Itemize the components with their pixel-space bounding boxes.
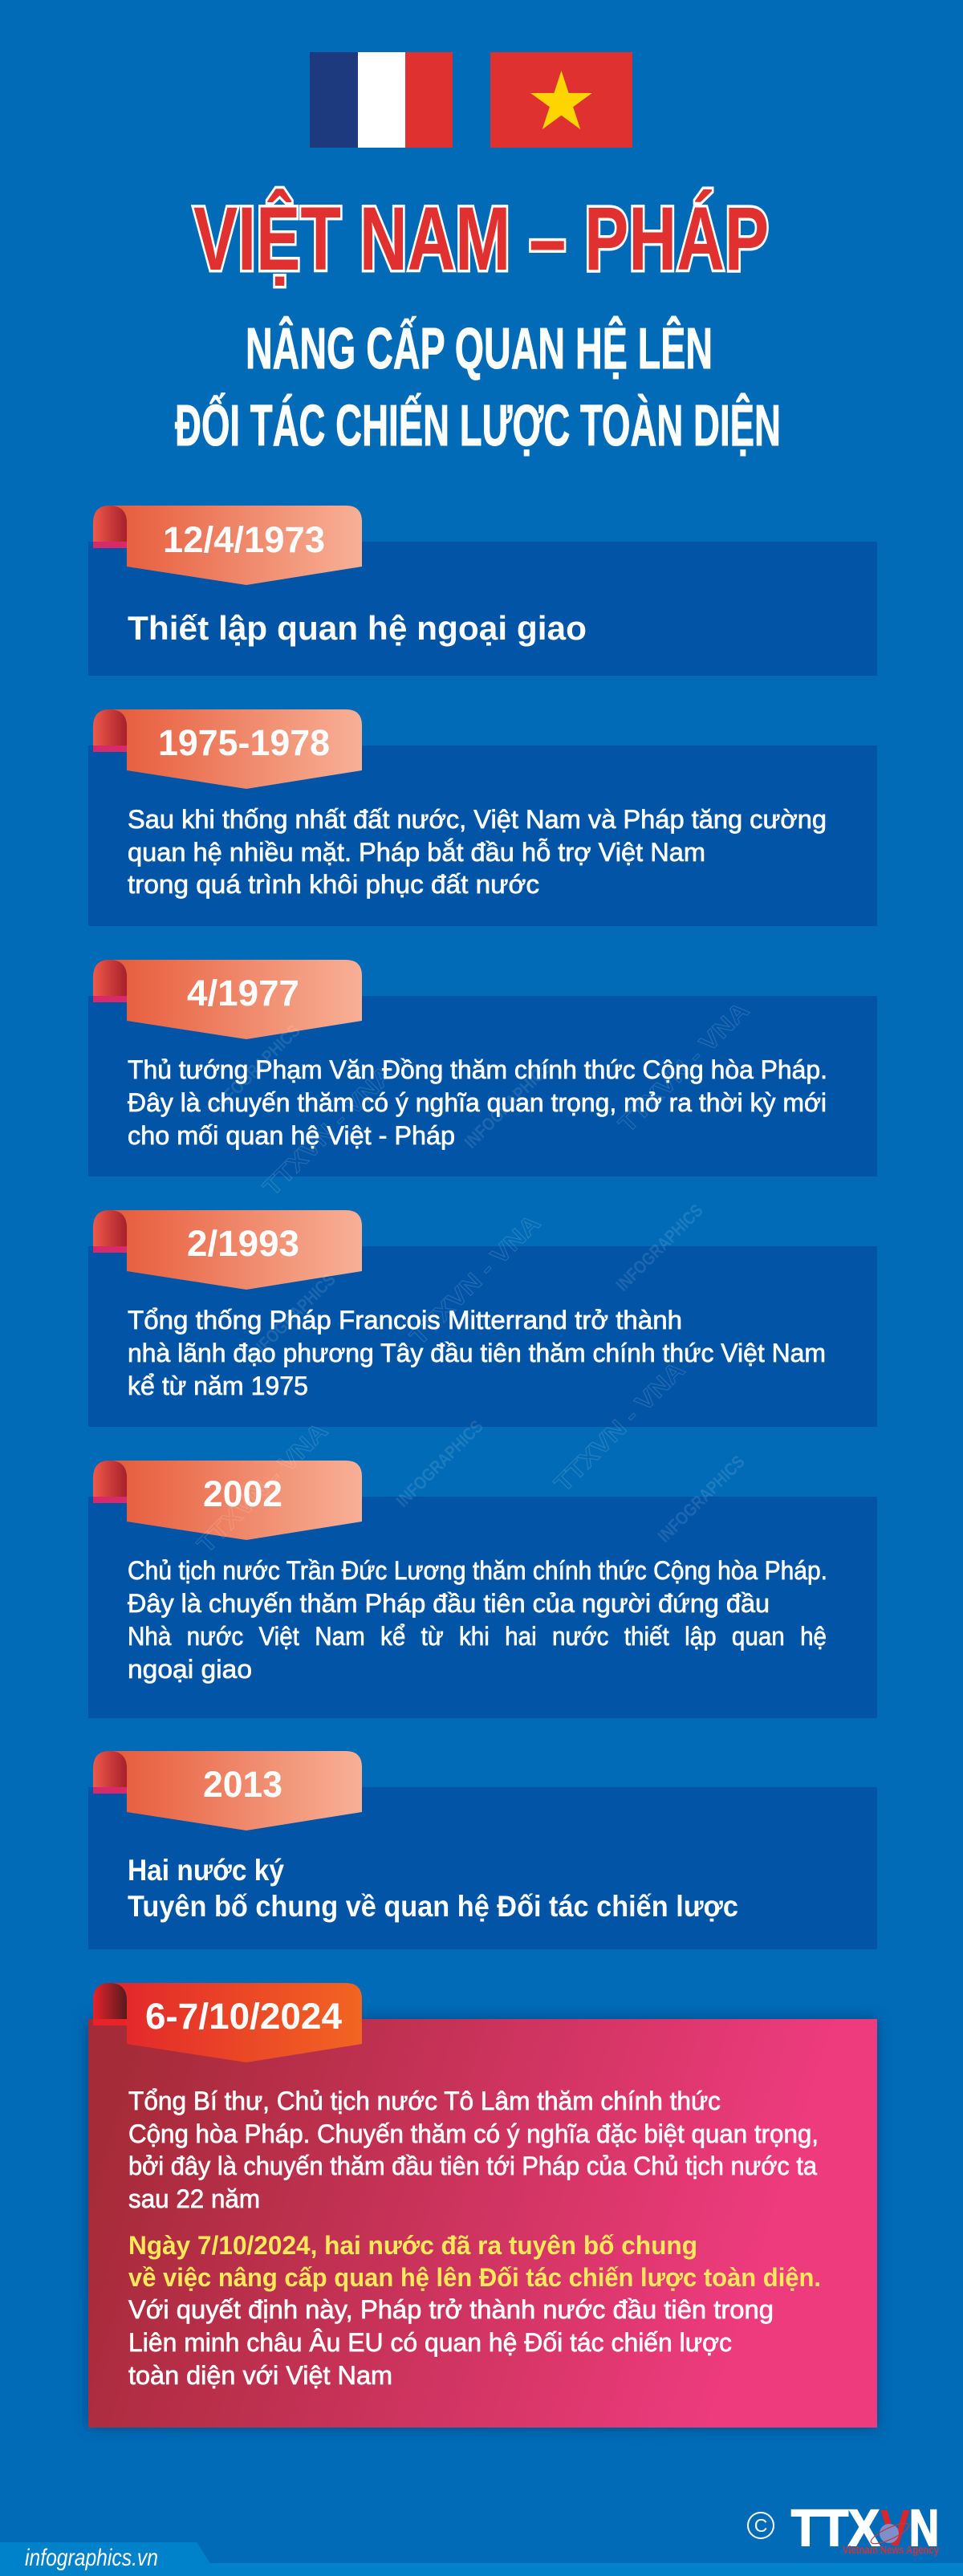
text: 4/1977: cho mối quan hệ Việt - Pháp xyxy=(128,1121,455,1150)
panel: 12/4/1973 xyxy=(88,506,877,676)
panel: 2002 xyxy=(88,1461,877,1718)
text: 2002: Nhà nước Việt Nam kể từ khi hai nước thiết lập quan hệ xyxy=(128,1622,827,1651)
watermarks: INFOGRAPHICS xyxy=(245,1270,339,1364)
watermarks: TTXVN - VNA xyxy=(258,1061,399,1201)
text: visit description: bởi đây là chuyến thăm đầu tiên tới Pháp của Chủ tịch nước ta xyxy=(128,2151,817,2180)
footer band xyxy=(0,2542,963,2576)
date ribbon: 2013 xyxy=(93,1751,362,1830)
date ribbon: 6-7/10/2024: 6-7/10/2024 xyxy=(145,1996,342,2037)
text: visit description: Tổng Bí thư, Chủ tịch nước Tô Lâm thăm chính thức xyxy=(128,2086,721,2115)
logo: TTXVN: N xyxy=(909,2499,939,2557)
date ribbon: 12/4/1973: 12/4/1973 xyxy=(163,519,325,560)
text: visit description: sau 22 năm xyxy=(128,2184,260,2213)
subtitle: NÂNG CẤP QUAN HỆ LÊN xyxy=(246,316,713,381)
text: highlighted statement: về việc nâng cấp quan hệ lên Đối tác chiến lược toàn diện. xyxy=(128,2263,821,2292)
text: 2013: Hai nước ký xyxy=(128,1854,284,1887)
footer site name: infographics.vn xyxy=(25,2545,158,2571)
watermarks: TTXVN - VNA xyxy=(614,997,754,1138)
text: 4/1977 xyxy=(128,1055,827,1150)
watermarks xyxy=(193,997,754,1558)
date ribbon: 6-7/10/2024 xyxy=(93,1983,362,2062)
text: 2013 xyxy=(128,1854,738,1923)
text: 1975-1978 xyxy=(128,805,827,899)
text: highlighted statement xyxy=(128,2231,821,2292)
title: VIỆT NAM – PHÁP xyxy=(193,189,769,289)
text: EU significance: Với quyết định này, Pháp trở thành nước đầu tiên trong xyxy=(128,2295,774,2324)
watermarks: INFOGRAPHICS xyxy=(612,1201,707,1295)
date ribbon: 2002 xyxy=(93,1461,362,1540)
text: EU significance xyxy=(128,2295,774,2390)
text: visit description xyxy=(128,2086,819,2213)
logo: TTXVN xyxy=(748,2499,939,2557)
text: 12/4/1973: Thiết lập quan hệ ngoại giao xyxy=(128,609,587,647)
panel: 4/1977 xyxy=(88,960,877,1176)
text: 1975-1978: Sau khi thống nhất đất nước, Việt Nam và Pháp tăng cường xyxy=(128,805,827,834)
text: 2002: Đây là chuyến thăm Pháp đầu tiên của người đứng đầu xyxy=(128,1589,770,1618)
text: 2/1993: Tổng thống Pháp Francois Mitterrand trở thành xyxy=(128,1306,682,1335)
text: 2/1993: kể từ năm 1975 xyxy=(128,1371,308,1400)
panel: 1975-1978 xyxy=(88,709,877,926)
date ribbon: 1975-1978 xyxy=(93,709,362,789)
date ribbon: 4/1977: 4/1977 xyxy=(187,973,299,1014)
text: 2002 xyxy=(128,1556,827,1684)
watermarks: TTXVN - VNA xyxy=(193,1418,333,1558)
panel: 2/1993 xyxy=(88,1210,877,1427)
date ribbon: 2/1993 xyxy=(93,1210,362,1290)
text: 2002: Chủ tịch nước Trần Đức Lương thăm chính thức Cộng hòa Pháp. xyxy=(128,1556,827,1585)
text: 2013: Tuyên bố chung về quan hệ Đối tác chiến lược xyxy=(128,1890,738,1923)
flag: France xyxy=(310,52,453,148)
text: 1975-1978: quan hệ nhiều mặt. Pháp bắt đầu hỗ trợ Việt Nam xyxy=(128,838,705,867)
date ribbon: 2/1993: 2/1993 xyxy=(187,1223,299,1264)
date ribbon: 4/1977 xyxy=(93,960,362,1039)
flag: Vietnam xyxy=(490,52,632,148)
watermarks: INFOGRAPHICS xyxy=(209,1021,304,1115)
date ribbon: 12/4/1973 xyxy=(93,506,362,585)
text: 4/1977: Thủ tướng Phạm Văn Đồng thăm chính thức Cộng hòa Pháp. xyxy=(128,1055,827,1084)
logo: TTXVN: V xyxy=(880,2499,910,2557)
watermarks: TTXVN - VNA xyxy=(550,1357,690,1497)
logo: TTXVN: TTX xyxy=(791,2499,880,2557)
text: 1975-1978: trong quá trình khôi phục đất nước xyxy=(128,870,539,899)
text: EU significance: Liên minh châu Âu EU có quan hệ Đối tác chiến lược xyxy=(128,2328,732,2357)
text: highlighted statement: Ngày 7/10/2024, hai nước đã ra tuyên bố chung xyxy=(128,2231,697,2260)
watermarks: INFOGRAPHICS xyxy=(461,1058,555,1152)
watermarks: TTXVN - VNA xyxy=(405,1210,546,1351)
date ribbon: 1975-1978: 1975-1978 xyxy=(158,722,330,763)
text: 2/1993: nhà lãnh đạo phương Tây đầu tiên thăm chính thức Việt Nam xyxy=(128,1339,826,1367)
text: visit description: Cộng hòa Pháp. Chuyến thăm có ý nghĩa đặc biệt quan trọng, xyxy=(128,2119,819,2148)
text: 4/1977: Đây là chuyến thăm có ý nghĩa quan trọng, mở ra thời kỳ mới xyxy=(128,1088,827,1117)
watermarks: INFOGRAPHICS xyxy=(654,1452,749,1546)
panel: 2013 xyxy=(88,1751,877,1949)
panel: 6-7/10/2024 xyxy=(88,1983,877,2428)
date ribbon: 2002: 2002 xyxy=(203,1473,282,1514)
text: 2/1993 xyxy=(128,1306,826,1400)
watermarks: INFOGRAPHICS xyxy=(392,1416,487,1511)
subtitle xyxy=(175,316,781,458)
logo: TTXVN: Vietnam News Agency xyxy=(843,2543,939,2556)
logo: TTXVN: C xyxy=(754,2515,767,2536)
text: 2002: ngoại giao xyxy=(128,1655,252,1684)
text: EU significance: toàn diện với Việt Nam xyxy=(128,2361,392,2390)
date ribbon: 2013: 2013 xyxy=(203,1764,282,1805)
